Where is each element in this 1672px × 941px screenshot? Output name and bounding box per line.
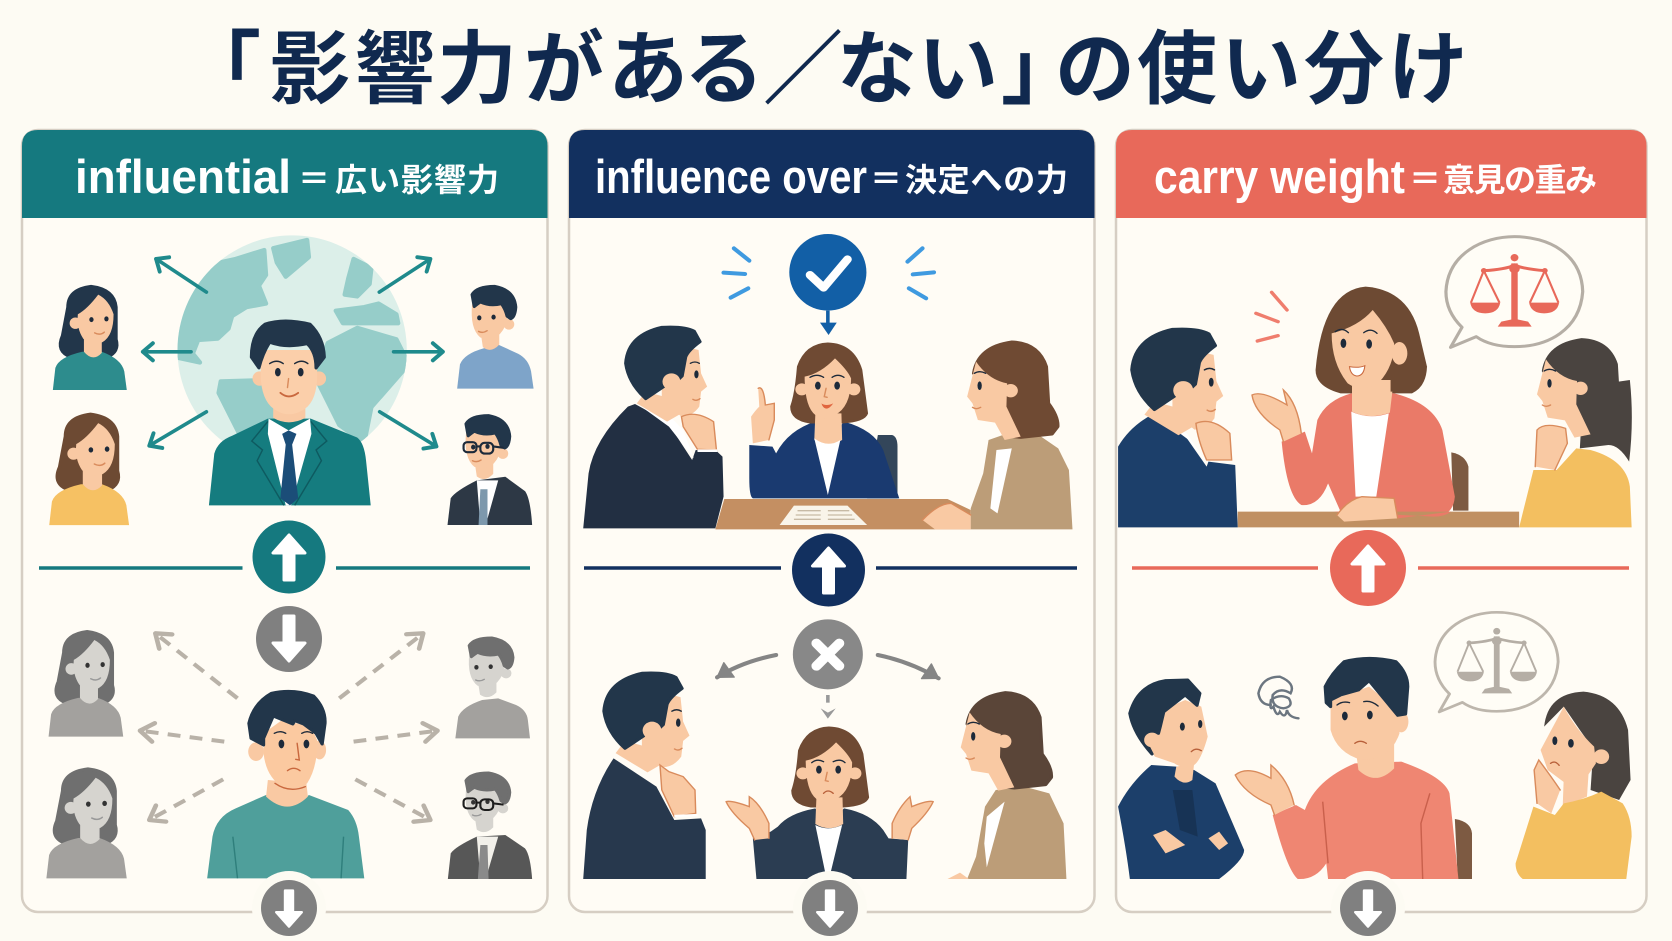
globe [178,236,407,442]
panel: carry weight [1116,130,1646,941]
divider with up arrow badge [1132,530,1629,606]
lower illustration: no decision power [583,619,1066,879]
person: left man in navy suit [1118,329,1238,527]
heading text: 決定への力 [905,162,1068,198]
lower illustration: little influence [46,632,532,879]
person: man with glasses [447,416,532,525]
arrows outward [143,259,443,446]
person: central woman in cardigan [1238,287,1519,527]
person: grey woman bottom [46,769,127,878]
bottom down arrow badge [1331,871,1405,941]
speech bubble with scales [1446,237,1583,347]
heading text: ＝ [298,161,330,197]
upper illustration: weighty opinion [1118,237,1632,527]
person: worried woman in yellow [1516,692,1632,879]
header band [22,130,548,218]
speech bubble with grey scales [1435,612,1558,712]
person: man with crossed arms [1118,680,1244,879]
panel frame [22,130,548,912]
person: grey man with glasses [448,773,532,879]
person: right woman in beige [922,342,1072,529]
icon: check badge with rays [724,234,934,335]
person: right woman in yellow [1519,340,1632,527]
heading text: influence over [595,150,867,203]
person: man in blue shirt [457,286,534,389]
divider with up arrow badge [39,520,530,594]
person: left man in navy suit [583,673,706,879]
heading text [1154,150,1597,203]
person: central woman speaking [749,344,899,498]
header band [569,130,1094,218]
person: grey man [455,638,530,738]
panel: influence over [569,130,1094,941]
panel frame [1116,130,1646,912]
bottom down arrow badge [793,871,867,941]
header band [1116,130,1646,218]
panel: influential [22,130,548,941]
heading text: ＝ [1409,161,1441,197]
accent rays [1256,292,1287,341]
divider with up arrow badge [584,534,1077,606]
person: central businessman [209,321,371,505]
upper illustration: wide influence [49,235,534,525]
person: woman in yellow [49,414,129,525]
table with document [715,499,971,529]
heading text: ＝ [870,161,902,197]
heading text [75,150,499,203]
heading text: influential [75,150,291,203]
heading text: 意見の重み [1443,162,1597,198]
person: central man in coral sweater [1235,658,1472,879]
person: left man in dark suit [583,327,724,528]
person: right woman in beige [947,693,1066,879]
heading text: 広い影響力 [335,162,499,198]
bottom down arrow badge [252,871,326,941]
person: central woman shrugging [726,728,933,879]
title: 「影響力がある／ない」の使い分け [181,25,1468,114]
down arrow badge [256,606,322,672]
person: unsure central man [207,691,364,878]
upper illustration: decision meeting [583,234,1072,529]
panel frame [569,130,1094,912]
icon: cross badge with arrows [717,619,939,719]
icon: scribble of confusion [1258,677,1298,718]
lower illustration: light opinion [1118,612,1632,879]
heading text: carry weight [1154,150,1405,203]
heading text [595,150,1068,203]
person: woman in teal [53,286,127,390]
person: grey woman top [49,632,123,737]
dashed arrows [140,633,437,820]
